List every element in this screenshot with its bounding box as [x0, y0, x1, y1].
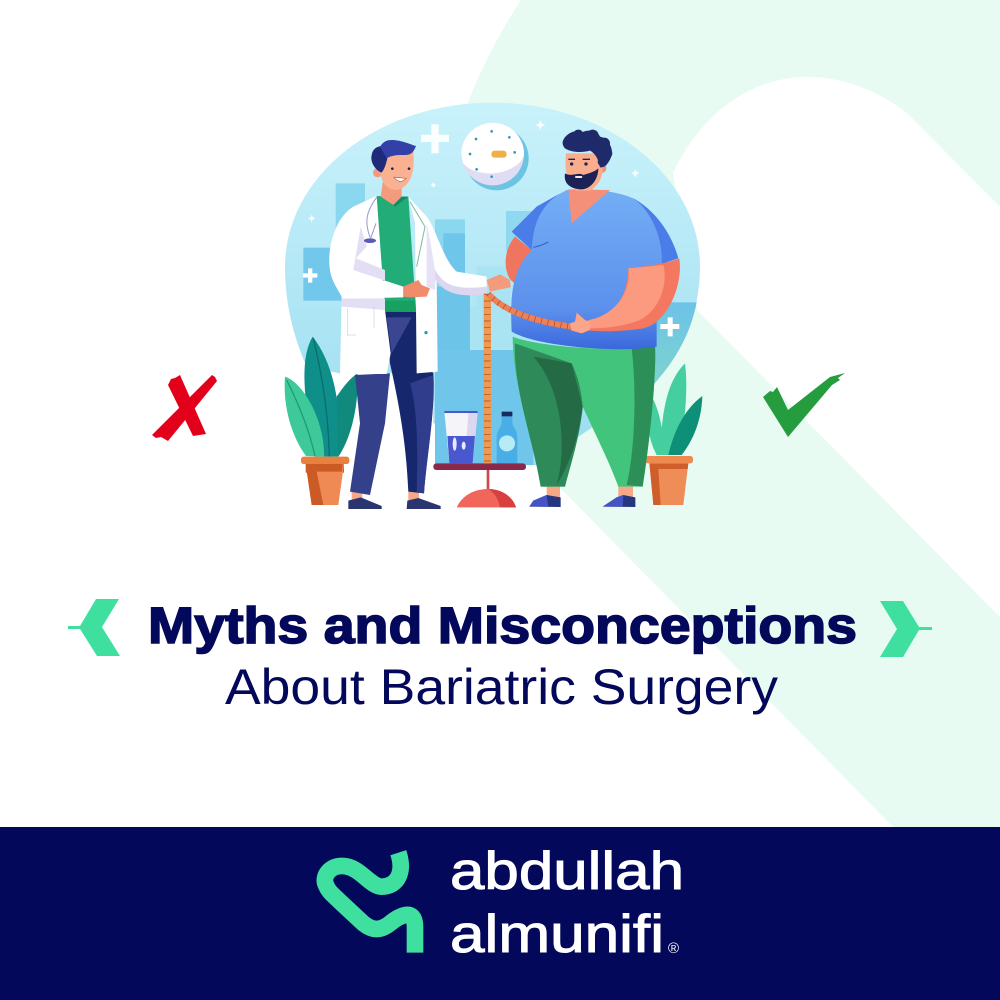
patient hand on waist: [570, 313, 590, 333]
subtitle: About Bariatric Surgery: [225, 659, 778, 715]
logo mark: [325, 853, 415, 953]
logo wordmark: almunifi: [450, 905, 664, 964]
table with glass and bottle: [433, 411, 526, 507]
wall clock: [461, 123, 529, 190]
right potted plant: [645, 363, 702, 505]
patient: [506, 130, 680, 507]
registered mark: ®: [668, 940, 679, 957]
left chevron: [68, 599, 120, 656]
backdrop circle: [285, 103, 700, 465]
footer banner: [0, 827, 1000, 1000]
left potted plant: [285, 337, 358, 505]
logo wordmark: abdullah: [450, 842, 684, 901]
title: Myths and Misconceptions: [148, 597, 857, 654]
red cross mark: [152, 375, 217, 441]
illustration: doctor measuring patient: [285, 103, 702, 509]
doctor: [329, 140, 511, 509]
measuring tape: [484, 293, 572, 463]
right chevron: [880, 601, 932, 657]
mint background shape: [415, 0, 1000, 827]
logo wordmark: [450, 842, 684, 964]
green check mark: [763, 373, 845, 437]
city buildings: [303, 183, 697, 465]
plus signs and sparkles: [303, 120, 679, 336]
